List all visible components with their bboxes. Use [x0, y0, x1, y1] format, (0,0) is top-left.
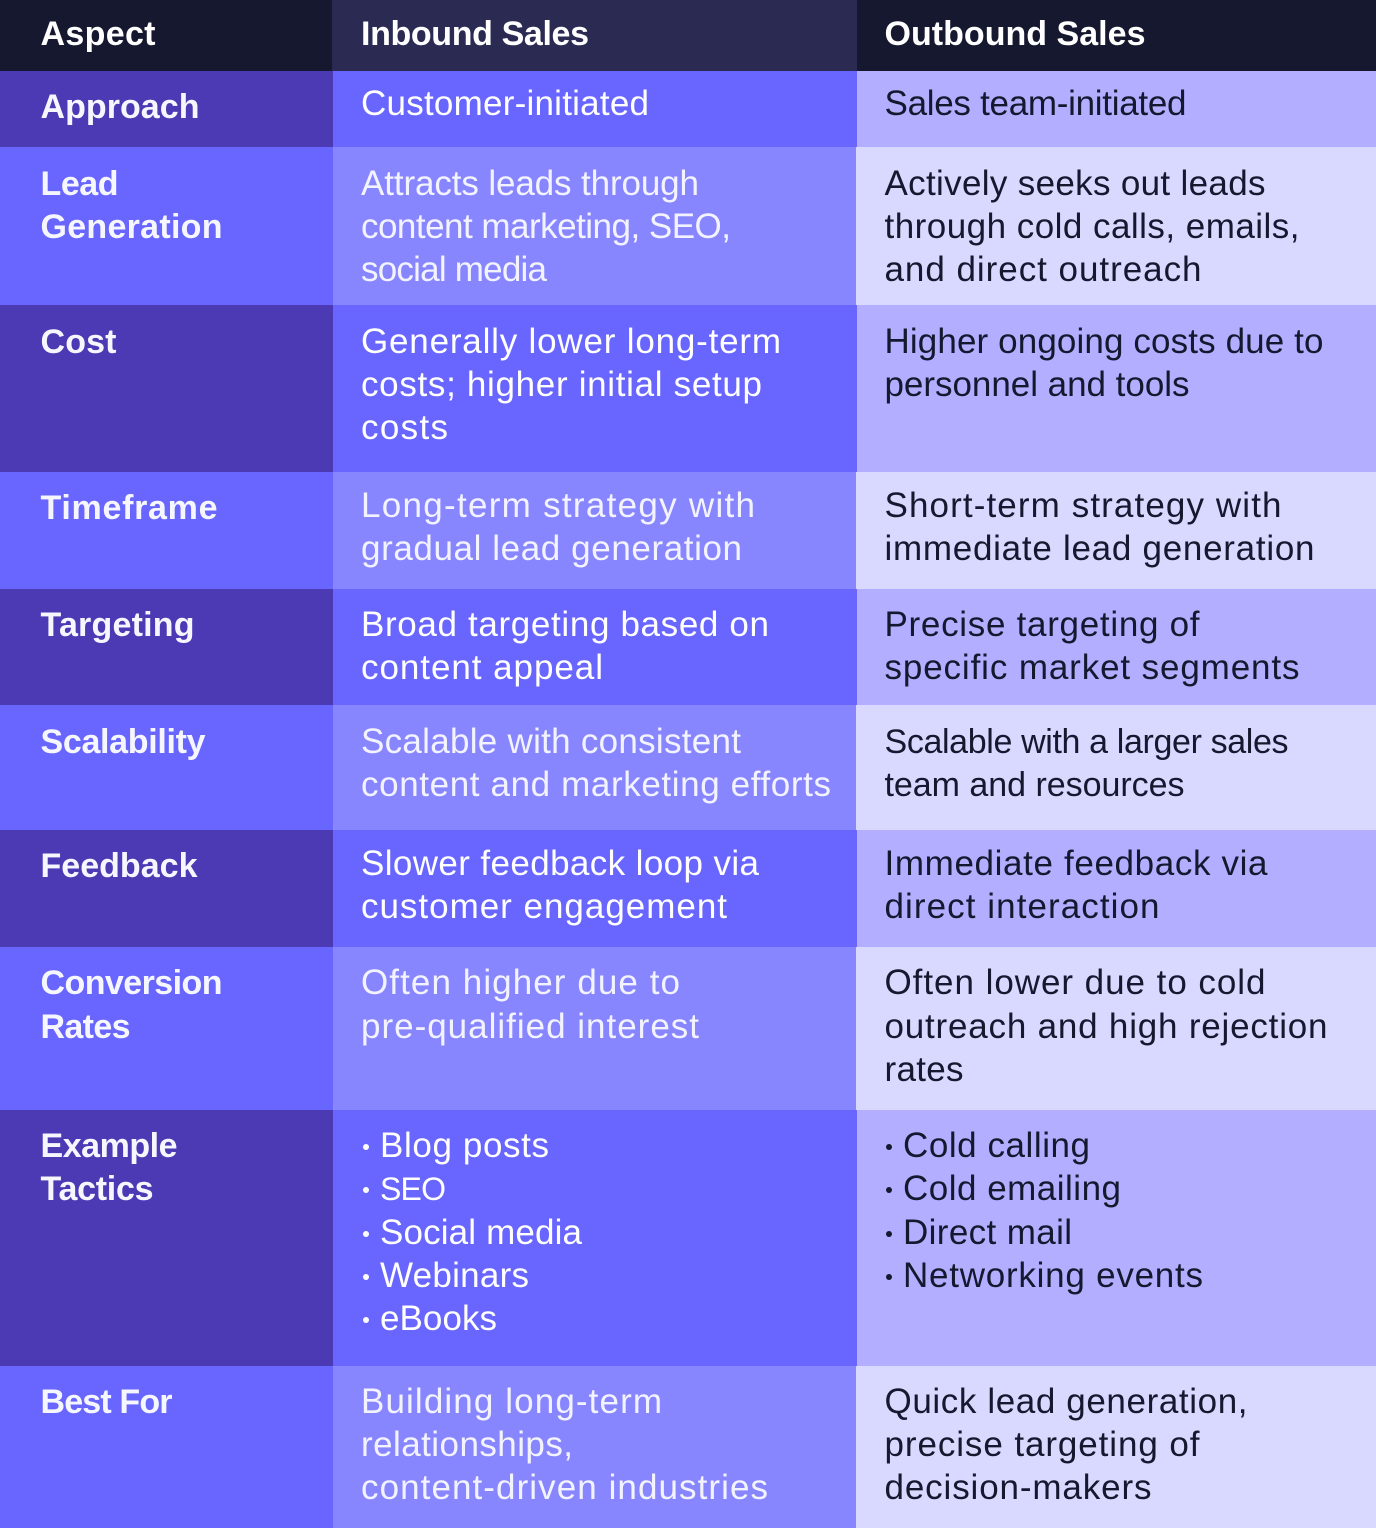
- row: Timeframe: [0, 472, 1376, 589]
- header row: Inbound Sales: [361, 15, 589, 53]
- row: Targeting: [0, 589, 1376, 705]
- row: Best For: Quick lead generation,: [884, 1382, 1248, 1421]
- row: Conversion Rates: Often higher due to: [361, 963, 680, 1002]
- row: Feedback: Feedback: [40, 847, 198, 885]
- row: Example Tactics: Social media: [380, 1213, 583, 1252]
- row: Scalability: team and resources: [884, 766, 1184, 804]
- row: Targeting: Precise targeting of: [884, 605, 1200, 644]
- row: Scalability: Scalable with a larger sales: [884, 723, 1288, 761]
- row: Conversion Rates: rates: [884, 1050, 964, 1089]
- row: Example Tactics: Networking events: [903, 1256, 1203, 1295]
- row: Timeframe: gradual lead generation: [361, 529, 742, 568]
- row: Example Tactics: Cold calling: [903, 1126, 1090, 1165]
- row: Feedback: direct interaction: [884, 887, 1160, 926]
- row: Best For: relationships,: [361, 1425, 573, 1464]
- row: Approach: Customer-initiated: [361, 84, 649, 123]
- row: Scalability: [0, 705, 1376, 830]
- header row: Aspect: [40, 15, 156, 53]
- row: Conversion Rates: [0, 947, 1376, 1110]
- row: Example Tactics: Example: [40, 1127, 178, 1165]
- row: Best For: Building long-term: [361, 1382, 662, 1421]
- row: Targeting: Targeting: [40, 606, 194, 644]
- row: Approach: Sales team-initiated: [884, 84, 1186, 123]
- row: Best For: decision-makers: [884, 1468, 1152, 1507]
- row: Example Tactics: [0, 1110, 1376, 1366]
- row: Lead Generation: social media: [361, 250, 548, 289]
- row: Conversion Rates: Rates: [40, 1008, 130, 1046]
- row: Conversion Rates: pre-qualified interest: [361, 1007, 699, 1046]
- row: Example Tactics: Tactics: [40, 1170, 154, 1208]
- row: Example Tactics: Direct mail: [903, 1213, 1072, 1252]
- row: Lead Generation: Attracts leads through: [361, 164, 699, 203]
- row: Timeframe: Timeframe: [40, 489, 218, 527]
- row: Approach: [0, 71, 1376, 147]
- header row: Outbound Sales: [884, 15, 1146, 53]
- row: Lead Generation: Generation: [40, 208, 222, 246]
- row: Example Tactics: eBooks: [380, 1299, 497, 1338]
- row: Example Tactics: SEO: [380, 1171, 446, 1207]
- row: Cost: Higher ongoing costs due to: [884, 322, 1324, 361]
- row: Scalability: Scalability: [40, 723, 206, 761]
- row: Scalability: Scalable with consistent: [361, 722, 741, 761]
- row: Feedback: customer engagement: [361, 887, 727, 926]
- row: Feedback: Slower feedback loop via: [361, 844, 760, 883]
- row: Lead Generation: Actively seeks out leads: [884, 164, 1266, 203]
- row: Targeting: specific market segments: [884, 648, 1300, 687]
- row: Cost: Cost: [40, 323, 116, 361]
- row: Example Tactics: Blog posts: [380, 1126, 549, 1165]
- row: Best For: [0, 1366, 1376, 1528]
- row: Targeting: Broad targeting based on: [361, 605, 769, 644]
- row: Feedback: Immediate feedback via: [884, 844, 1268, 883]
- row: Lead Generation: [0, 147, 1376, 305]
- row: Lead Generation: through cold calls, emails,: [884, 207, 1300, 246]
- row: Conversion Rates: Often lower due to cold: [884, 963, 1266, 1002]
- row: Example Tactics: Cold emailing: [903, 1169, 1121, 1208]
- row: Conversion Rates: Conversion: [40, 964, 222, 1002]
- row: Cost: personnel and tools: [884, 365, 1190, 404]
- row: Cost: [0, 305, 1376, 472]
- row: Scalability: content and marketing efforts: [361, 765, 831, 804]
- row: Approach: Approach: [40, 88, 200, 126]
- row: Lead Generation: content marketing, SEO,: [361, 207, 731, 246]
- row: Cost: costs: [361, 408, 448, 447]
- row: Cost: costs; higher initial setup: [361, 365, 762, 404]
- row: Timeframe: immediate lead generation: [884, 529, 1314, 568]
- row: Lead Generation: and direct outreach: [884, 250, 1202, 289]
- row: Timeframe: Long-term strategy with: [361, 486, 755, 525]
- row: Timeframe: Short-term strategy with: [884, 486, 1282, 525]
- row: Best For: content-driven industries: [361, 1468, 768, 1507]
- row: Example Tactics: Webinars: [380, 1256, 529, 1295]
- row: Cost: Generally lower long-term: [361, 322, 781, 361]
- row: Best For: precise targeting of: [884, 1425, 1200, 1464]
- row: Targeting: content appeal: [361, 648, 603, 687]
- row: Lead Generation: Lead: [40, 165, 118, 203]
- row: Best For: Best For: [40, 1383, 172, 1421]
- row: Conversion Rates: outreach and high rejection: [884, 1007, 1328, 1046]
- row: Feedback: [0, 830, 1376, 947]
- header row: [0, 0, 1376, 71]
